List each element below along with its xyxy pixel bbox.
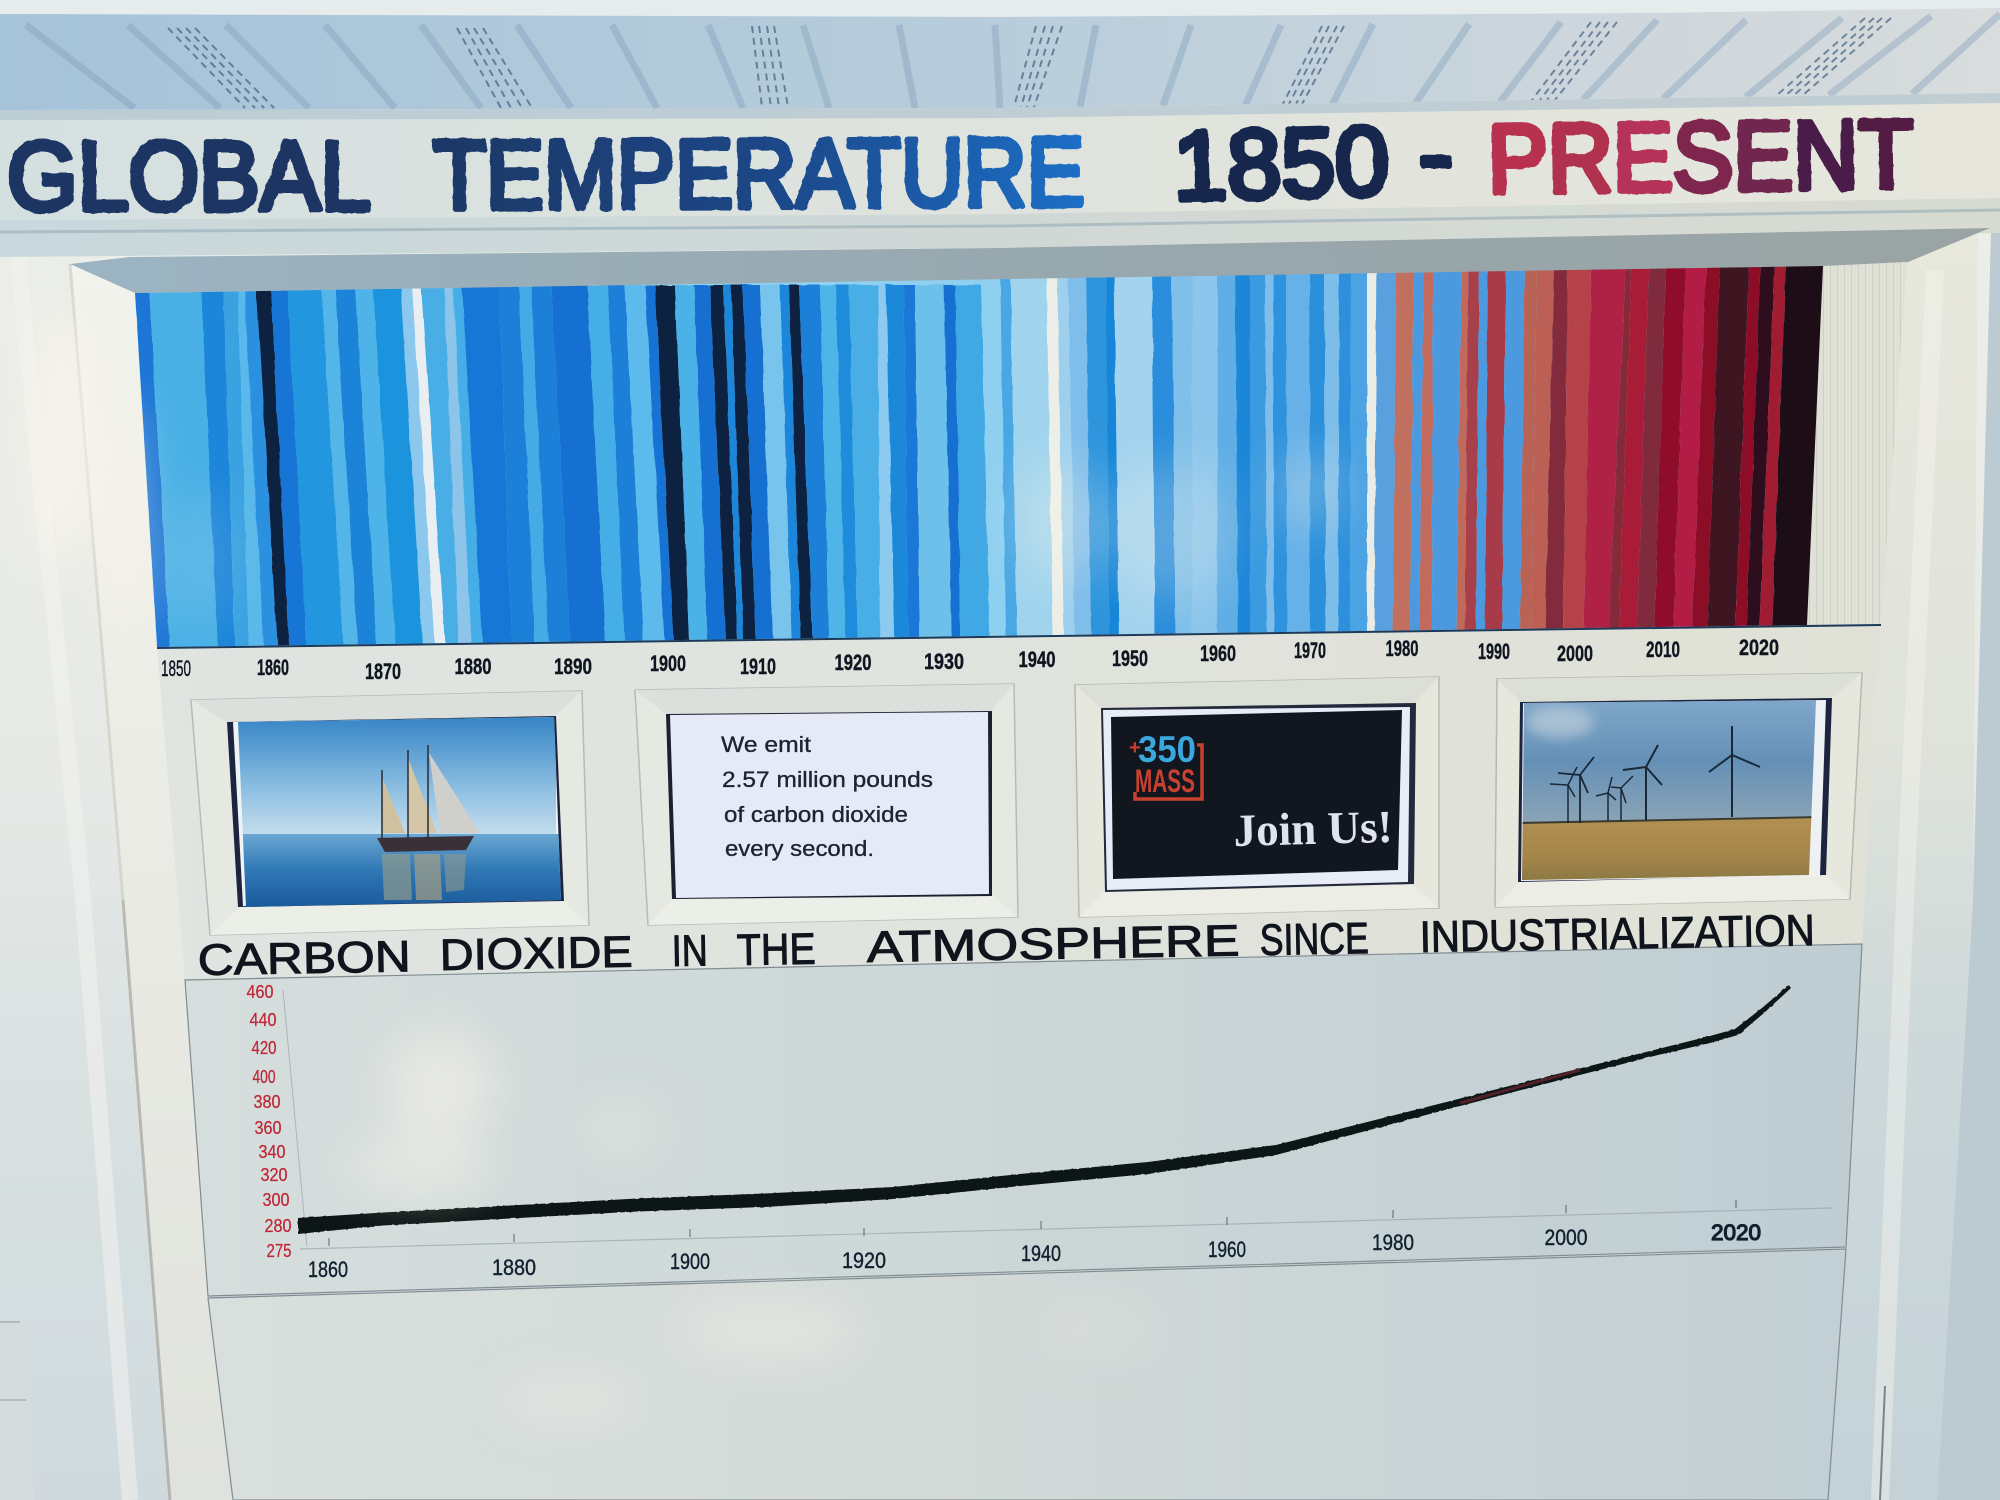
stripes year axis labels: 1950 — [1112, 646, 1148, 671]
stripes year axis labels: 1870 — [365, 659, 401, 684]
stripes year axis labels: 2020 — [1739, 635, 1779, 660]
y axis labels: 340 — [258, 1142, 286, 1162]
stripes year axis labels: 2000 — [1557, 641, 1593, 666]
text: emissions statement — [721, 732, 933, 861]
stripes year axis labels: 1860 — [257, 655, 289, 680]
x axis labels: 1920 — [842, 1248, 886, 1273]
y axis labels: 400 — [252, 1067, 276, 1087]
y axis labels: 420 — [252, 1038, 276, 1058]
text: join us: Join Us! — [1233, 801, 1393, 856]
warming stripes — [120, 255, 1840, 655]
x axis labels: 1900 — [670, 1249, 710, 1274]
text: emissions statement: 2.57 million pounds — [722, 767, 933, 792]
stripes year axis labels: 1980 — [1386, 636, 1418, 661]
panel: sailboat photo — [191, 691, 589, 935]
CO2 line chart — [246, 982, 1832, 1282]
y axis labels: 280 — [264, 1216, 292, 1236]
text: emissions statement: of carbon dioxide — [724, 802, 908, 827]
panel row background — [157, 625, 1881, 980]
stripes year axis labels: 1990 — [1478, 639, 1510, 664]
text: emissions statement: every second. — [725, 836, 874, 861]
y axis labels: 360 — [254, 1118, 282, 1138]
stripes year axis labels: 1850 — [161, 656, 191, 681]
y axis labels: 320 — [260, 1165, 288, 1185]
dappled sunlight — [34, 310, 1345, 1420]
x axis labels: 1940 — [1021, 1241, 1061, 1266]
x axis labels: 1860 — [308, 1257, 348, 1282]
stripes year axis labels: 2010 — [1646, 637, 1680, 662]
stripes year axis labels: 1960 — [1200, 641, 1236, 666]
title word: temperature: TEMPERATURE — [433, 117, 1085, 230]
chart axes — [283, 990, 1832, 1249]
stripe axis baseline — [157, 625, 1881, 648]
icon: 350 Mass logo — [1129, 729, 1202, 799]
red tint on recent curve — [1460, 1070, 1580, 1103]
CO2 chart heading: SINCE — [1259, 914, 1369, 965]
icon: wind turbines — [1550, 726, 1760, 823]
stripes year axis labels: 1930 — [924, 649, 964, 674]
CO2 chart heading: ATMOSPHERE — [866, 916, 1240, 972]
stripes year axis labels: 1880 — [454, 654, 492, 679]
fascia board — [0, 93, 2000, 293]
title: global temperature 1850 - present — [7, 99, 1914, 231]
y axis labels — [246, 982, 292, 1261]
panel: wind turbines photo — [1495, 673, 1862, 907]
icon: 350 Mass logo: 350 — [1138, 729, 1196, 770]
title year: 1850: 1850 — [1172, 105, 1390, 221]
x axis labels — [308, 1220, 1761, 1282]
CO2 chart heading: INDUSTRIALIZATION — [1419, 906, 1815, 962]
title word: global: GLOBAL — [7, 121, 371, 231]
x axis labels: 1960 — [1208, 1237, 1246, 1262]
x axis labels: 2020 — [1711, 1220, 1761, 1245]
CO2 chart heading: DIOXIDE — [439, 928, 633, 980]
stripes year axis labels: 1900 — [650, 651, 686, 676]
CO2 chart heading: CARBON — [197, 932, 411, 985]
CO2 chart heading: IN — [671, 926, 708, 976]
x axis labels: 1980 — [1372, 1230, 1414, 1255]
panel: 350 Mass join us — [1075, 677, 1439, 917]
x axis labels: 1880 — [492, 1255, 536, 1280]
text: emissions statement: We emit — [721, 732, 811, 757]
icon: 350 Mass logo: MASS — [1135, 763, 1195, 799]
y axis labels: 440 — [250, 1010, 276, 1030]
y axis labels: 275 — [266, 1241, 292, 1261]
CO2 chart heading: THE — [736, 925, 816, 975]
CO2 curve — [298, 985, 1791, 1234]
stripes year axis labels: 1970 — [1294, 638, 1326, 663]
icon: 350 Mass logo: + — [1129, 737, 1141, 759]
panel: emissions note — [635, 684, 1018, 925]
title dash: - — [1419, 99, 1453, 209]
chart panel background — [185, 944, 1862, 1296]
stripes year axis labels: 1940 — [1018, 647, 1056, 672]
y axis labels: 380 — [254, 1092, 280, 1112]
title word: present: PRESENT — [1487, 99, 1914, 214]
y axis labels: 300 — [262, 1190, 290, 1210]
CO2 chart heading — [197, 906, 1815, 985]
y axis labels: 460 — [246, 982, 274, 1002]
siding section right of stripes — [1807, 262, 1907, 625]
stripes year axis labels: 1910 — [740, 654, 776, 679]
icon: schooner — [377, 745, 480, 900]
bottom door panel — [208, 1249, 1846, 1500]
stripes year axis labels: 1890 — [554, 654, 592, 679]
soffit with vents — [0, 8, 2000, 110]
x axis labels: 2000 — [1544, 1225, 1588, 1250]
stripes year axis labels — [161, 635, 1779, 684]
stripes year axis labels: 1920 — [834, 650, 872, 675]
